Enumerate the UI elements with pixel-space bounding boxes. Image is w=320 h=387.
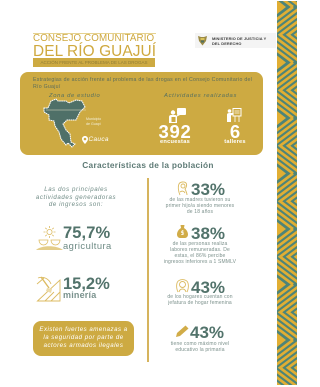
intro: income activities [36, 186, 116, 208]
percent: 43% [190, 323, 224, 342]
icon: survey [169, 108, 186, 123]
callout: armed actors: la seguridad por parte de [43, 334, 124, 341]
description [167, 294, 233, 306]
panel: strategies [20, 72, 263, 155]
stat: education [170, 323, 229, 353]
stat: female-headed households [167, 278, 233, 306]
description: jefatura de hogar femenina [168, 300, 232, 306]
icon: mother [178, 182, 188, 196]
subtitle band: ACCIÓN FRENTE AL PROBLEMA DE LAS DROGAS [40, 60, 148, 65]
ministry name: DEL DERECHO [212, 40, 242, 46]
stat: paid work [164, 224, 236, 265]
agriculture label: agricultura [63, 240, 112, 250]
icon: money bag [177, 225, 188, 238]
description: primer hijo/a siendo menores [166, 203, 234, 209]
municipality label: Municipio [86, 117, 101, 121]
workshop count: 6 [230, 121, 240, 142]
survey count: 392 [159, 121, 191, 142]
title block [33, 33, 156, 67]
percent: 38% [191, 224, 225, 243]
callout: armed actors [33, 320, 134, 356]
location: Cauca [82, 136, 109, 144]
municipality label [86, 117, 101, 126]
heading: activities: Actividades realizadas [164, 93, 237, 99]
agriculture percent: 75,7% [63, 224, 110, 242]
title line 1: CONSEJO COMUNITARIO [33, 33, 154, 44]
mining label: minería [63, 290, 96, 300]
stat: workshops [224, 108, 246, 144]
description: tiene como máximo nivel [171, 340, 229, 346]
intro text: Estrategias de acción frente al problema de las drogas en el Consejo Comunitario del [33, 76, 252, 82]
description: ingresos inferiores a 1 SMMLV [164, 259, 236, 265]
description: educativo la primaria [175, 347, 225, 353]
description: estas, el 86% percibe [175, 253, 225, 259]
heading: study zone: Zona de estudio [49, 93, 100, 99]
icon: workshop [227, 108, 242, 122]
title line 2: DEL RÍO GUAJUÍ [33, 43, 156, 60]
mining percent: 15,2% [63, 275, 110, 293]
description [164, 240, 236, 265]
decorative woven strip [277, 1, 297, 385]
ministry logo [195, 33, 276, 48]
icon: pencil [176, 326, 188, 337]
ministry name: MINISTERIO DE JUSTICIA Y [212, 36, 266, 40]
callout: armed actors: actores armados ilegales [44, 342, 123, 349]
icon: map pin [82, 136, 88, 144]
description [170, 340, 229, 353]
intro text [33, 76, 252, 90]
stat: agriculture [36, 224, 112, 251]
description: labores remuneradas. De [170, 247, 230, 253]
callout: armed actors: Existen fuertes amenazas a [39, 326, 128, 332]
intro: income activities: de ingresos son: [49, 201, 103, 208]
stat: mining [36, 275, 110, 302]
ministry name [212, 36, 266, 46]
municipality label: de Guapi [86, 122, 101, 126]
icon: pickaxe and mountain [36, 276, 60, 302]
place name: Cauca [88, 136, 109, 143]
stat: teenage mothers [166, 180, 234, 215]
intro text: Río Guajuí [33, 84, 60, 90]
subtitle band [33, 58, 155, 67]
section heading: Características de la población [82, 160, 214, 170]
intro: income activities: Las dos principales [44, 186, 108, 193]
central divider [147, 178, 148, 362]
icon: woman [176, 279, 189, 292]
icon: sun and crops [36, 226, 63, 250]
percent: 43% [191, 278, 225, 297]
map of Guapi [44, 98, 86, 148]
percent: 33% [191, 180, 225, 199]
survey label: encuestas [160, 138, 190, 144]
description: de 18 años [187, 209, 213, 215]
workshop label: talleres [224, 138, 246, 144]
icon: coat of arms [198, 36, 207, 46]
description: de las madres tuvieron su [169, 197, 230, 203]
description: de los hogares cuentan con [167, 294, 233, 300]
description [166, 197, 234, 215]
intro: income activities: actividades generadoras [36, 194, 116, 200]
stat: surveys [159, 108, 191, 144]
description: de las personas realiza [173, 240, 227, 246]
